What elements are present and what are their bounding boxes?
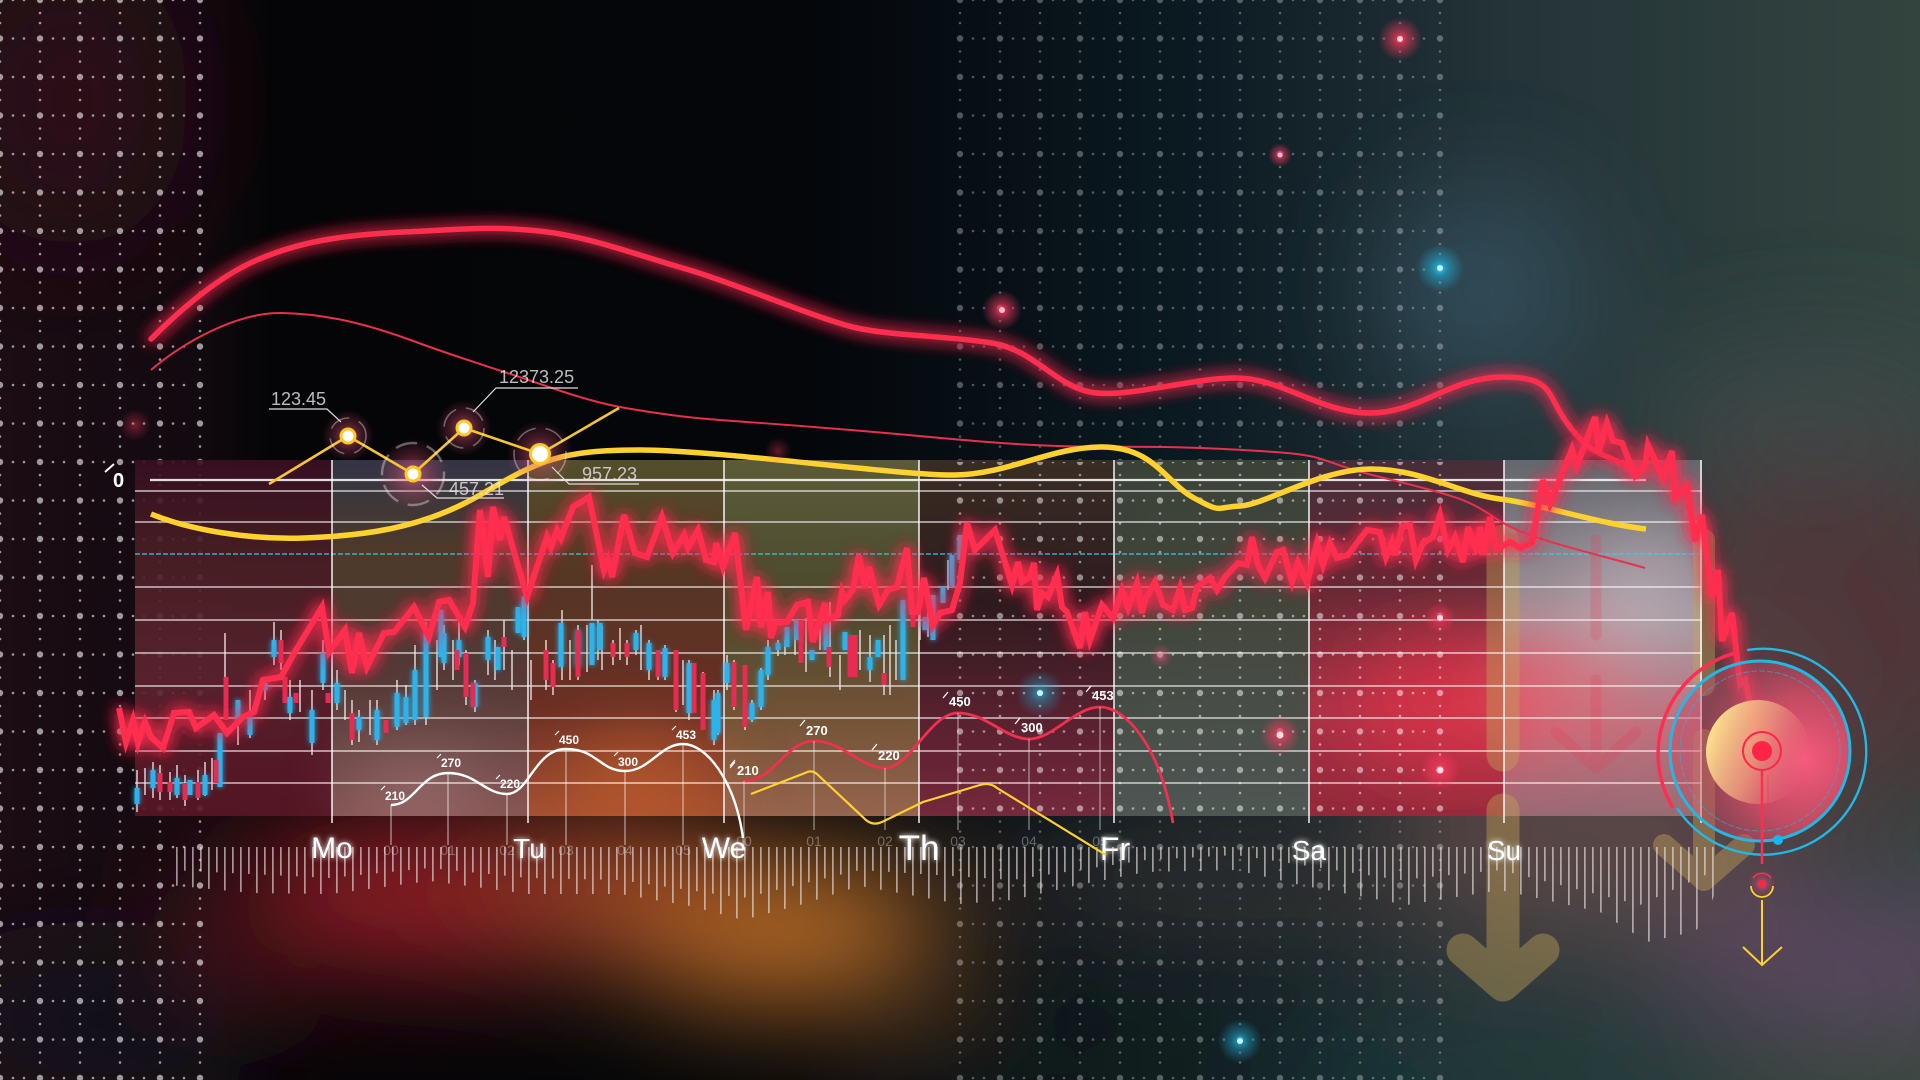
chart panel with weekly columns — [135, 460, 1702, 830]
axis faint numbers: 03 — [558, 842, 574, 858]
axis faint numbers: 03 — [950, 833, 966, 849]
day labels: Mo — [311, 832, 353, 865]
small target marker — [1748, 870, 1776, 898]
candle wicks — [137, 560, 948, 812]
callouts: data point values: 12373.25 — [499, 367, 574, 387]
day vertical lines — [332, 460, 1701, 823]
callouts: data point values: 457.21 — [449, 479, 504, 499]
day labels: Sa — [1292, 835, 1327, 866]
red mini curve with labels: 453 — [1092, 688, 1114, 703]
axis zero label — [105, 464, 124, 492]
white mini curve with labels: 220 — [500, 777, 520, 791]
candlestick chart — [137, 535, 960, 812]
soft down arrows — [1463, 540, 1744, 985]
thin red trend line — [151, 313, 1645, 568]
red mini curve with labels: 270 — [806, 723, 828, 738]
white mini curve with labels: 450 — [559, 733, 579, 747]
jagged red price line — [119, 417, 1762, 751]
horizontal grid lines — [135, 480, 1702, 783]
white mini curve with labels — [381, 726, 743, 845]
red mini curve with labels: 450 — [949, 694, 971, 709]
white mini curve with labels: 300 — [618, 755, 638, 769]
axis faint numbers: 04 — [1021, 833, 1037, 849]
red mini curve with labels: 300 — [1021, 720, 1043, 735]
cyan reference line — [135, 553, 1702, 555]
day labels: We — [702, 832, 746, 865]
day labels: Tu — [513, 833, 545, 864]
target circle at end of decline — [1658, 649, 1866, 864]
red mini curve with labels: 210 — [737, 763, 759, 778]
thick red trend line with glow — [151, 228, 1640, 473]
axis zero label: 0 — [113, 470, 124, 492]
axis faint numbers: 02 — [499, 842, 515, 858]
candle bodies: blue — [137, 535, 960, 804]
white mini curve with labels: 210 — [385, 789, 405, 803]
day labels: Su — [1487, 835, 1521, 866]
day labels: Th — [899, 829, 939, 868]
axis faint numbers: 01 — [440, 842, 456, 858]
axis faint numbers: 05 — [675, 842, 691, 858]
callouts: data point values — [269, 367, 639, 499]
callouts: data point values: 123.45 — [271, 389, 326, 409]
callouts: data point values: 957.23 — [582, 464, 637, 484]
axis faint numbers: 04 — [617, 842, 633, 858]
axis faint numbers: 00 — [736, 833, 752, 849]
candle bodies: red — [160, 613, 913, 800]
yellow down arrow — [1743, 900, 1782, 965]
white mini curve with labels: 453 — [676, 728, 696, 742]
thick yellow trend line — [151, 447, 1646, 538]
dot grid: centre right — [956, 0, 1444, 1080]
axis faint numbers: 02 — [877, 833, 893, 849]
glowing particles — [119, 17, 1464, 1063]
axis faint numbers: 05 — [1092, 833, 1108, 849]
day labels — [311, 829, 1521, 868]
yellow mini line — [751, 771, 1106, 855]
axis faint numbers: 01 — [806, 833, 822, 849]
yellow zigzag with data points — [269, 400, 619, 510]
red mini curve with labels: 220 — [878, 748, 900, 763]
white mini curve with labels: 270 — [441, 756, 461, 770]
dot grid: left — [0, 0, 204, 1080]
axis faint numbers — [383, 833, 1108, 858]
dot grid overlay inside panel — [956, 462, 1444, 814]
axis faint numbers: 00 — [383, 842, 399, 858]
day labels: Fr — [1100, 831, 1130, 867]
waveform tick marks — [170, 847, 1716, 942]
red mini curve with labels — [730, 686, 1173, 850]
